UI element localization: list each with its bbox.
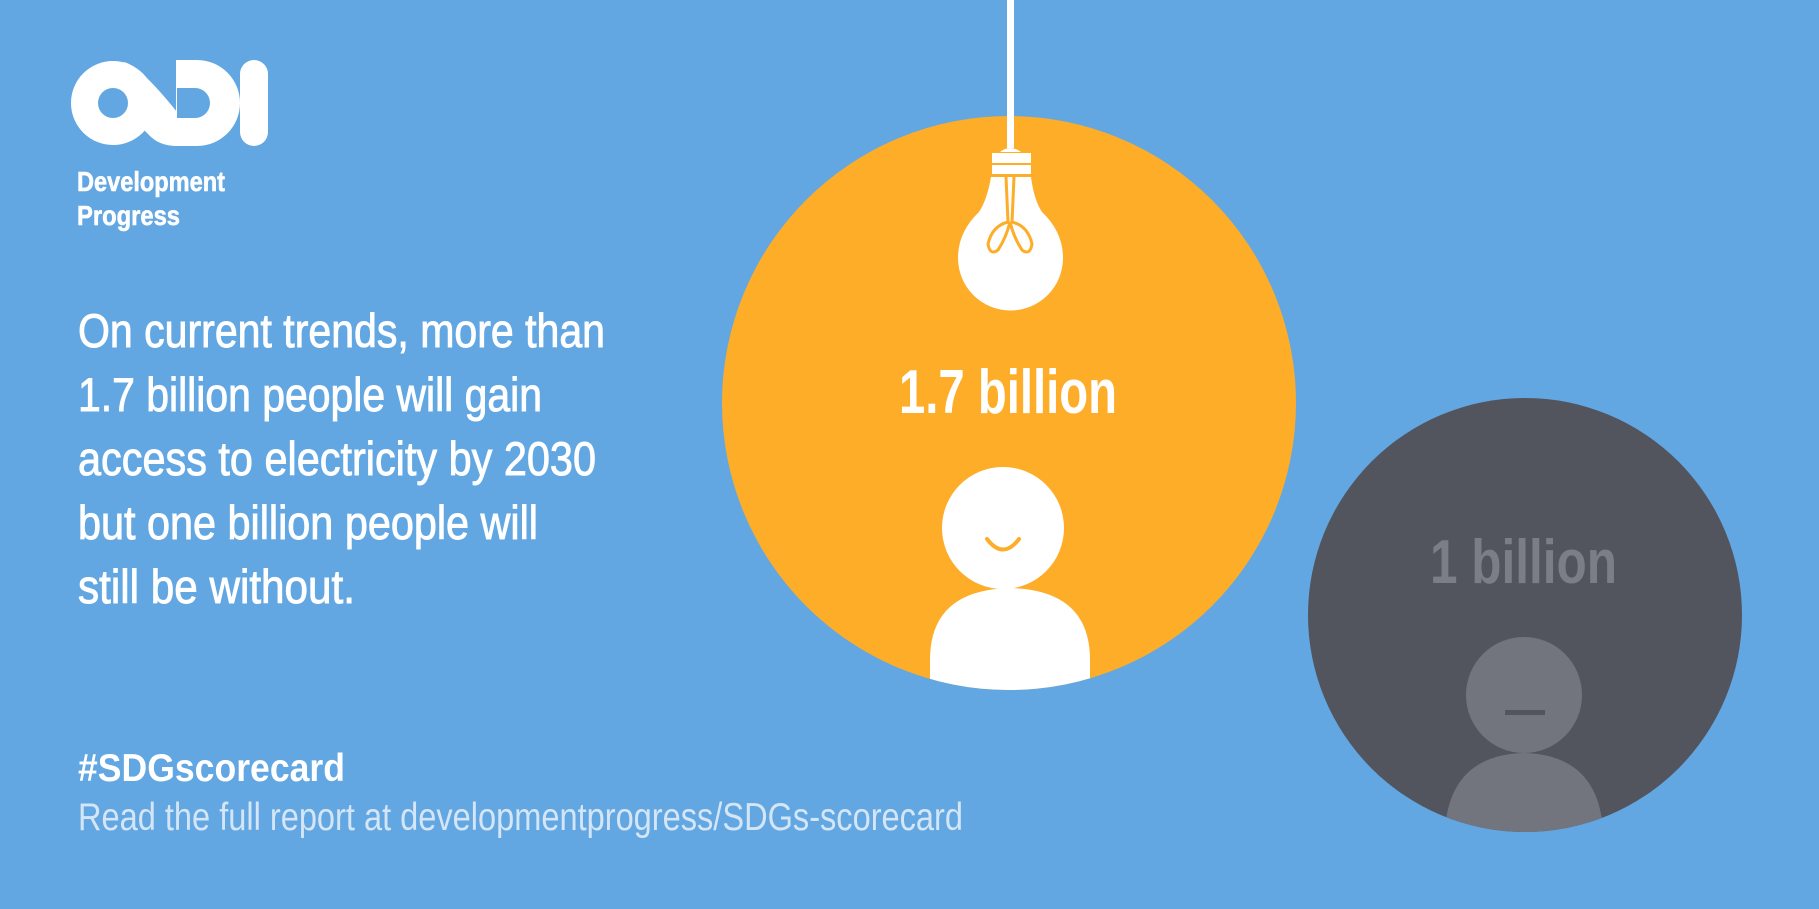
main text block: [78, 304, 605, 613]
hashtag: #SDGscorecard: [78, 747, 345, 790]
panel: orange circle 1.7 billion: [722, 0, 1296, 700]
main text block: but one billion people will: [78, 496, 538, 549]
icon: ODI mark: [71, 60, 268, 146]
icon: hanging light bulb: [958, 0, 1063, 311]
graphic: circles: [722, 0, 1742, 832]
logo text: Progress: [77, 200, 180, 231]
footer: hashtag and report link: [78, 747, 963, 839]
label: 1.7 billion: 1.7 billion: [899, 358, 1117, 427]
logo text: [77, 166, 225, 232]
main text block: still be without.: [78, 560, 355, 613]
icon: neutral person: [1446, 637, 1602, 832]
panel: grey circle 1 billion: [1308, 398, 1742, 860]
logo text: Development: [77, 166, 225, 197]
logo: ODI Development Progress: [71, 60, 268, 232]
label: 1 billion: 1 billion: [1430, 528, 1617, 597]
main text block: 1.7 billion people will gain: [78, 368, 542, 421]
icon: smiling person: [930, 467, 1090, 700]
